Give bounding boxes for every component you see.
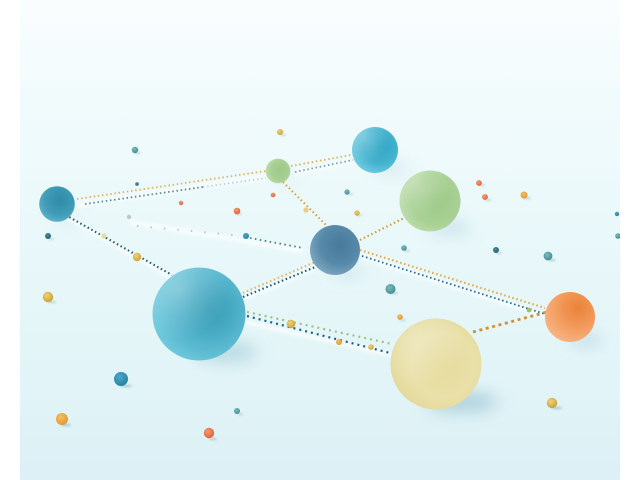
link: big blue node to yellow node — [247, 312, 392, 353]
link: slate hub to orange node — [360, 250, 545, 314]
sphere: top teal — [352, 127, 398, 173]
dotted links — [62, 154, 547, 353]
sphere: left blue — [39, 186, 75, 222]
small beads — [43, 129, 621, 438]
sphere: small green — [266, 159, 290, 183]
link: slate hub to big blue node — [243, 262, 320, 297]
sphere: green — [400, 170, 460, 232]
large spheres — [39, 127, 595, 410]
link: yellow node to orange node — [473, 312, 547, 332]
link: slate hub to green node — [360, 218, 404, 241]
link: small green node to top teal node — [291, 154, 356, 172]
sphere: big blue — [152, 268, 246, 360]
sphere: pale yellow — [390, 318, 482, 410]
link: left node to big blue node — [62, 213, 172, 275]
sphere: orange — [545, 292, 595, 342]
link: left node to small green node — [77, 171, 266, 204]
link: faint dotted trail — [137, 226, 303, 248]
small bead shadows — [48, 134, 562, 440]
sphere: slate hub — [310, 225, 360, 275]
sphere shadows — [196, 161, 602, 420]
white glow under dotted links — [62, 161, 545, 355]
link: small green node to slate hub — [282, 182, 326, 226]
